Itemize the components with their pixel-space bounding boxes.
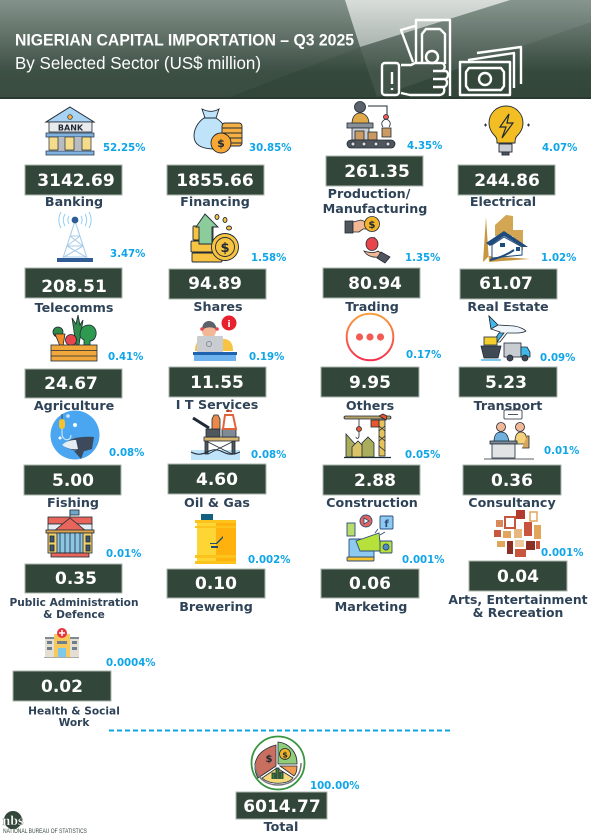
value: 9.95 [349,373,391,393]
card: Financing [167,109,291,209]
share: 4.35% [407,141,442,152]
share: 0.01% [544,446,579,457]
value: 5.00 [52,471,94,491]
card: Shares [169,214,286,314]
value box [323,268,420,298]
icon: three dots in ring [347,314,393,360]
label: Oil & Gas [184,495,250,510]
card: Agriculture [25,315,143,413]
icon: bank: BANK [58,124,84,132]
value box [25,268,122,298]
value: 6014.77 [243,797,321,817]
icon: house and towers [483,215,530,262]
value: 208.51 [41,277,107,297]
logo: National Bureau of Statistics: NATIONAL BUREAU OF STATISTICS [3,829,87,835]
value: 3142.69 [37,171,115,191]
share: 0.0004% [106,658,156,669]
value box [25,564,122,593]
value box [469,561,567,591]
icon: arts collage [494,510,541,557]
value: 261.35 [344,162,410,182]
card: Total [236,736,360,834]
share: 1.02% [541,253,576,264]
label: Brewering [179,599,253,614]
icon: plane, ship and truck [481,316,530,361]
card: Arts, Entertainment & Recreation: & Recreation [473,605,563,620]
value: 24.67 [44,374,98,394]
card: Health & Social Work: Work [59,717,90,729]
value: 0.02 [41,677,83,697]
value: 11.55 [190,373,244,393]
label: Health & Social [28,706,120,718]
label: Consultancy [468,495,556,510]
icon: light bulb [484,106,530,155]
label: Arts, Entertainment [448,592,588,607]
icon: fish and hook [50,410,100,460]
title: NIGERIAN CAPITAL IMPORTATION – Q3 2025 [15,30,354,50]
label: Others [346,398,394,413]
label: Production/ [328,186,411,201]
label: Electrical [470,194,536,209]
share: 0.08% [251,450,286,461]
card: Public Administration & Defence [9,510,141,621]
share: 1.35% [405,253,440,264]
label: I T Services [176,397,258,412]
label: Trading [345,299,399,314]
value: 0.35 [55,569,97,589]
value box [167,165,264,195]
icon: production line [347,102,395,148]
icon: vegetable crate [51,315,97,361]
share: 4.07% [542,143,577,154]
value: 5.23 [485,373,527,393]
header banner [0,0,591,99]
label: Public Administration [9,597,139,609]
card: Fishing [24,410,144,510]
card: Consultancy [463,410,579,510]
value: 244.86 [474,171,540,191]
card: Health & Social Work [13,628,156,729]
share: 0.41% [108,352,143,363]
share: 0.05% [405,450,440,461]
card: I T Services [169,316,284,412]
card: Real Estate [460,215,576,314]
icon: banknotes [460,47,521,95]
icon: consultation at desk [484,410,534,459]
label: Marketing [335,599,407,614]
value: 0.06 [349,574,391,594]
value box [458,165,555,195]
share: 0.17% [406,350,441,361]
card: Others [321,314,441,413]
label: Transport [474,398,542,413]
value: 61.07 [479,274,533,294]
value box [25,369,122,398]
share: 0.19% [249,352,284,363]
label: Shares [193,299,243,314]
card: Public Administration & Defence: & Defence [43,609,105,621]
value box [326,156,423,186]
value: 80.94 [348,274,402,294]
share: 1.58% [251,253,286,264]
value box [25,165,122,195]
value: 94.89 [188,274,242,294]
value: 2.88 [354,471,396,491]
share: 0.001% [402,555,444,566]
value: 1855.66 [176,171,254,191]
share: 100.00% [310,781,360,792]
logo: National Bureau of Statistics [2,811,87,835]
value box [236,792,327,819]
share: 52.25% [103,143,145,154]
card: Transport [459,316,575,413]
value box [13,671,111,701]
value box [460,269,557,299]
icon: hospital [44,628,79,658]
icon: money bag and coins: $ [217,137,225,150]
value: 0.04 [497,567,539,587]
label: Real Estate [467,299,549,314]
share: 30.85% [249,143,291,154]
icon: offshore rig [191,409,240,460]
subtitle: By Selected Sector (US$ million) [15,53,261,73]
value box [321,367,419,397]
card: Production / Manufacturing [323,102,442,216]
card: Electrical [458,106,577,209]
logo: National Bureau of Statistics: nbs [2,814,24,829]
share: 0.09% [540,353,575,364]
icon: government building [46,510,94,557]
value box [24,465,121,495]
share: 0.01% [106,549,141,560]
value: 0.10 [195,574,237,594]
share: 0.001% [541,548,583,559]
share: 0.002% [248,555,290,566]
icon: rising coins: $ [220,241,230,256]
card: Marketing [321,515,444,614]
card: Telecomms [25,212,145,315]
label: Construction [326,495,418,510]
value box [168,464,266,494]
icon: telecom tower [57,212,93,262]
label: Telecomms [35,300,113,315]
value box [167,569,265,598]
icon: crane and buildings [344,414,391,458]
card: Brewering [167,514,290,614]
icon: megaphone and social: f [384,519,389,530]
value box [459,367,557,397]
icon: pie chart: $ [266,754,273,765]
value box [463,465,561,495]
card: Production / Manufacturing: Manufacturing [323,201,427,216]
value box [169,367,266,397]
card: Arts, Entertainment & Recreation [448,510,588,620]
card: Construction [323,414,440,510]
share: 0.08% [109,448,144,459]
icon: barrel [195,514,236,564]
value box [323,465,420,495]
value box [169,269,266,299]
label: Fishing [47,495,99,510]
icon: pie chart: $ [282,750,288,760]
label: Financing [180,194,250,209]
icon: hands exchanging money and apple: $ [369,220,376,231]
card: Banking [25,107,145,209]
icon: hand holding cash [382,20,450,96]
share: 3.47% [110,249,145,260]
icon: IT support agent: i [227,320,231,330]
value box [321,569,419,598]
value: 0.36 [491,471,533,491]
value: 4.60 [196,470,238,490]
card: Oil & Gas [168,409,286,510]
label: Banking [45,194,103,209]
label: Total [264,819,298,834]
icon: pie chart [252,736,304,790]
label: Agriculture [34,398,114,413]
card: Trading [323,216,440,314]
